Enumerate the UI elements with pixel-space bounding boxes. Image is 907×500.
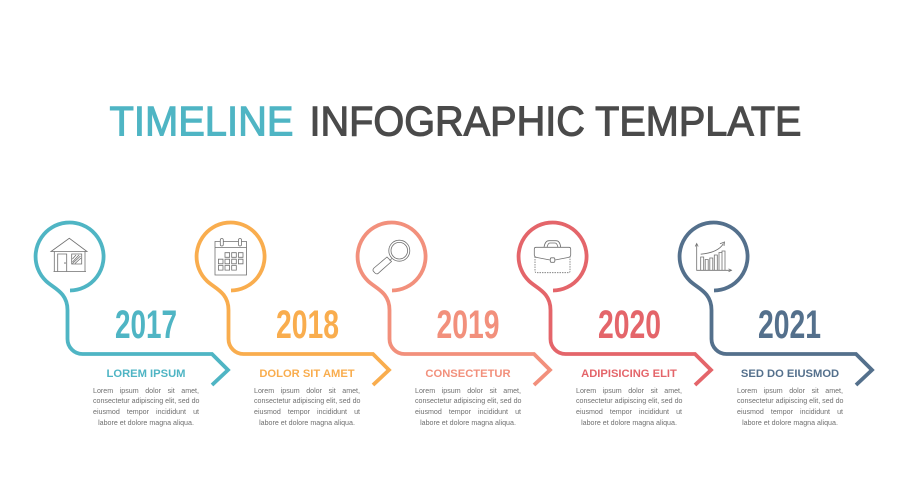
icon: house (51, 238, 87, 272)
step: 2018 (197, 223, 389, 430)
description 2020: Lorem ipsum dolor sit amet, (576, 387, 682, 395)
description 2019: consectetur adipiscing elit, sed do (415, 397, 521, 405)
heading: consectetur: CONSECTETUR (425, 368, 511, 380)
title: TIMELINE (110, 98, 294, 144)
connector line 2018 (197, 223, 389, 385)
icon: growth chart (695, 242, 732, 272)
title (110, 98, 802, 144)
connector line 2017 (36, 223, 228, 385)
year 2021: 2021 (758, 303, 821, 347)
description 2021: consectetur adipiscing elit, sed do (737, 397, 843, 405)
heading: adipisicing elit: ADIPISICING ELIT (581, 368, 677, 380)
connector line 2020 (519, 223, 711, 385)
heading: lorem ipsum: LOREM IPSUM (107, 368, 185, 380)
heading: dolor sit amet: DOLOR SIT AMET (259, 368, 355, 380)
icon: calendar (215, 238, 246, 275)
description 2017: eiusmod tempor incididunt ut (93, 408, 199, 416)
icon: briefcase (534, 241, 571, 273)
connector line 2021 (680, 223, 872, 385)
connector line 2019 (358, 223, 550, 385)
icon: magnifying glass (373, 240, 410, 274)
description 2018: consectetur adipiscing elit, sed do (254, 397, 360, 405)
description 2017: Lorem ipsum dolor sit amet, (93, 387, 199, 395)
description 2017: consectetur adipiscing elit, sed do (93, 397, 199, 405)
description 2019 (415, 386, 522, 430)
description 2019: Lorem ipsum dolor sit amet, (415, 387, 521, 395)
year 2020: 2020 (598, 303, 661, 347)
description 2021: labore et dolore magna aliqua. (742, 419, 838, 427)
description 2018: Lorem ipsum dolor sit amet, (254, 387, 360, 395)
description 2017 (93, 386, 200, 430)
description 2021: eiusmod tempor incididunt ut (737, 408, 843, 416)
year 2018: 2018 (276, 303, 339, 347)
year 2019: 2019 (436, 303, 500, 347)
description 2018: eiusmod tempor incididunt ut (254, 408, 360, 416)
description 2020 (576, 386, 683, 430)
step: 2019 (358, 223, 550, 430)
step: 2020 (519, 223, 711, 430)
description 2020: consectetur adipiscing elit, sed do (576, 397, 682, 405)
heading: sed do eiusmod: SED DO EIUSMOD (741, 368, 839, 380)
description 2021 (737, 386, 844, 430)
description 2020: labore et dolore magna aliqua. (581, 419, 677, 427)
step: 2017 (36, 223, 228, 430)
step: 2021 (680, 223, 872, 430)
description 2017: labore et dolore magna aliqua. (98, 419, 194, 427)
description 2020: eiusmod tempor incididunt ut (576, 408, 682, 416)
description 2019: eiusmod tempor incididunt ut (415, 408, 521, 416)
description 2019: labore et dolore magna aliqua. (420, 419, 516, 427)
description 2018 (254, 386, 361, 430)
description 2021: Lorem ipsum dolor sit amet, (737, 387, 843, 395)
title: INFOGRAPHIC TEMPLATE (310, 98, 802, 144)
year 2017: 2017 (115, 303, 177, 347)
description 2018: labore et dolore magna aliqua. (259, 419, 355, 427)
